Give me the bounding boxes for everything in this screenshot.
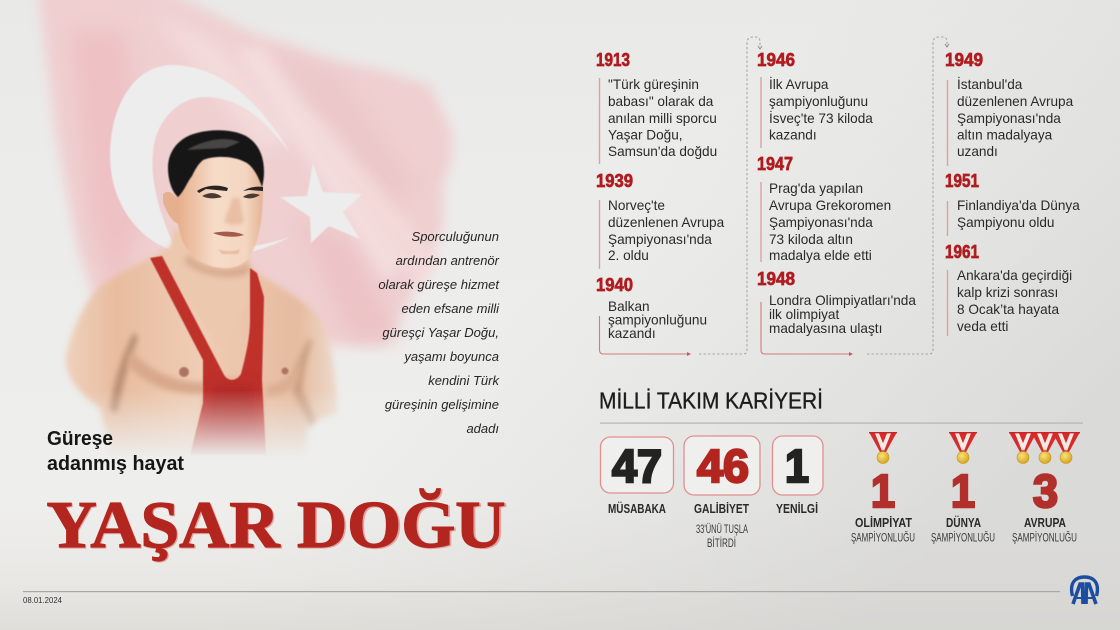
title: YAŞAR DOĞU xyxy=(47,489,507,563)
1949 entry: düzenlenen Avrupa xyxy=(957,94,1074,109)
intro text: kendini Türk xyxy=(428,373,500,388)
intro text: adadı xyxy=(466,421,499,436)
1940 entry xyxy=(596,274,707,356)
medal stat: europe: ŞAMPİYONLUĞU xyxy=(1012,532,1077,544)
1961 entry: kalp krizi sonrası xyxy=(957,285,1058,300)
1946 entry: İsveç'te 73 kiloda xyxy=(769,111,873,126)
flag star xyxy=(280,163,362,243)
1946 entry: İlk Avrupa xyxy=(769,77,829,92)
1939 entry: Norveç'te xyxy=(608,198,665,213)
icon: AA logo xyxy=(1072,577,1097,604)
flag crescent xyxy=(110,65,290,257)
1949 entry: İstanbul'da xyxy=(957,77,1023,92)
1948 entry: madalyasına ulaştı xyxy=(769,321,882,336)
intro text: yaşamı boyunca xyxy=(403,349,499,364)
portrait of Yaşar Doğu xyxy=(66,130,337,460)
dashed connector 2 xyxy=(867,37,949,354)
intro text: eden efsane milli xyxy=(401,301,500,316)
intro text: güreşinin gelişimine xyxy=(385,397,499,412)
1946 entry: şampiyonluğunu xyxy=(769,94,868,109)
neck xyxy=(168,228,250,267)
timeline column 1 xyxy=(596,49,725,356)
stat: 46 wins: 46 xyxy=(697,440,749,492)
flag xyxy=(38,0,452,345)
1913 entry: "Türk güreşinin xyxy=(608,77,699,92)
1947 entry: 1947 xyxy=(757,153,793,174)
medal stat: olympic: OLİMPİYAT xyxy=(855,515,912,530)
1951 entry: Finlandiya'da Dünya xyxy=(957,198,1080,213)
intro text: olarak güreşe hizmet xyxy=(378,277,500,292)
1939 entry: 1939 xyxy=(596,170,633,191)
medal stat: world: ŞAMPİYONLUĞU xyxy=(931,532,995,544)
1913 entry: Yaşar Doğu, xyxy=(608,128,683,142)
chin shade xyxy=(218,249,240,254)
ear xyxy=(163,192,180,224)
hair xyxy=(168,130,264,197)
section heading: MİLLİ TAKIM KARİYERİ xyxy=(599,388,823,414)
medal stat: olympic xyxy=(851,432,915,544)
medal stat: olympic: 1 xyxy=(871,465,895,517)
title: YAŞAR DOĞU xyxy=(46,488,505,562)
stat: 47 matches xyxy=(600,437,674,516)
1961 entry xyxy=(945,241,1072,336)
stat: 1 loss: YENİLGİ xyxy=(776,501,818,516)
footer date: 08.01.2024 xyxy=(23,596,63,605)
1961 entry: 1961 xyxy=(945,241,979,262)
stat: 47 matches: MÜSABAKA xyxy=(608,501,666,516)
stat: 46 wins: BİTİRDİ xyxy=(707,537,736,550)
1949 entry: altın madalyaya xyxy=(957,128,1053,142)
medal stat: europe xyxy=(1009,432,1080,544)
1946 entry: kazandı xyxy=(769,128,817,142)
torso xyxy=(66,245,337,460)
medal stat: world xyxy=(931,432,995,544)
1961 entry: 8 Ocak’ta hayata xyxy=(957,302,1059,317)
mouth xyxy=(213,232,244,237)
eyebrows xyxy=(197,186,228,193)
1913 entry: anılan milli sporcu xyxy=(608,111,717,126)
1949 entry: Şampiyonası'nda xyxy=(957,111,1061,126)
medal stat: europe: AVRUPA xyxy=(1024,515,1066,530)
intro text xyxy=(378,229,500,436)
medal stat: world: 1 xyxy=(951,465,975,517)
stat: 46 wins: 33'ÜNÜ TUŞLA xyxy=(696,524,748,536)
1949 entry: 1949 xyxy=(945,49,983,70)
intro text: ardından antrenör xyxy=(396,253,500,268)
1948 entry: Londra Olimpiyatları'nda xyxy=(769,293,916,308)
1940 entry: Balkan xyxy=(608,299,650,314)
1948 entry: ilk olimpiyat xyxy=(769,307,839,322)
1951 entry: Şampiyonu oldu xyxy=(957,215,1054,230)
nose xyxy=(225,198,244,225)
1947 entry: Şampiyonası'nda xyxy=(769,215,873,230)
1939 entry: Şampiyonası'nda xyxy=(608,232,712,247)
medal stat: world: DÜNYA xyxy=(946,515,981,530)
1939 entry: düzenlenen Avrupa xyxy=(608,215,725,230)
1947 entry: 73 kiloda altın xyxy=(769,232,853,247)
1949 entry xyxy=(945,49,1074,166)
neck shadow xyxy=(184,254,250,277)
medal stat: europe: 3 xyxy=(1033,465,1058,517)
1939 entry: 2. oldu xyxy=(608,248,649,263)
dashed connector 1 xyxy=(699,37,762,354)
subtitle xyxy=(47,428,184,475)
1913 entry: babası" olarak da xyxy=(608,94,714,109)
1948 entry xyxy=(757,268,916,356)
red singlet xyxy=(150,256,266,455)
1947 entry xyxy=(757,153,891,263)
subtitle: Güreşe xyxy=(47,428,113,450)
1948 entry: 1948 xyxy=(757,268,795,289)
torso shading xyxy=(110,332,316,428)
stat: 47 matches: 47 xyxy=(612,440,662,492)
intro text: güreşçi Yaşar Doğu, xyxy=(382,325,499,340)
1946 entry xyxy=(757,49,873,148)
1939 entry xyxy=(596,170,725,269)
eyes xyxy=(202,193,222,198)
1951 entry: 1951 xyxy=(945,170,979,191)
1913 entry xyxy=(596,49,717,164)
1949 entry: uzandı xyxy=(957,144,998,159)
1946 entry: 1946 xyxy=(757,49,795,70)
1940 entry: şampiyonluğunu xyxy=(608,312,707,328)
timeline column 2 xyxy=(757,49,916,356)
face xyxy=(176,150,263,268)
subtitle: adanmış hayat xyxy=(47,453,184,475)
1947 entry: madalya elde etti xyxy=(769,248,872,263)
1940 entry: kazandı xyxy=(608,326,656,341)
1951 entry xyxy=(945,170,1080,236)
stat: 1 loss: 1 xyxy=(785,440,809,492)
1947 entry: Prag'da yapılan xyxy=(769,181,863,196)
stat: 1 loss xyxy=(772,436,823,516)
1961 entry: veda etti xyxy=(957,319,1008,334)
stat: 46 wins xyxy=(684,436,760,550)
1947 entry: Avrupa Grekoromen xyxy=(769,198,891,213)
medal stat: olympic: ŞAMPİYONLUĞU xyxy=(851,532,915,544)
1940 entry: 1940 xyxy=(596,274,633,295)
1961 entry: Ankara'da geçirdiği xyxy=(957,268,1072,283)
hair highlight xyxy=(187,139,240,150)
1913 entry: 1913 xyxy=(596,49,630,70)
stat: 46 wins: GALİBİYET xyxy=(694,501,749,516)
1913 entry: Samsun'da doğdu xyxy=(608,144,717,159)
timeline column 3 xyxy=(945,49,1080,336)
intro text: Sporculuğunun xyxy=(412,229,499,244)
